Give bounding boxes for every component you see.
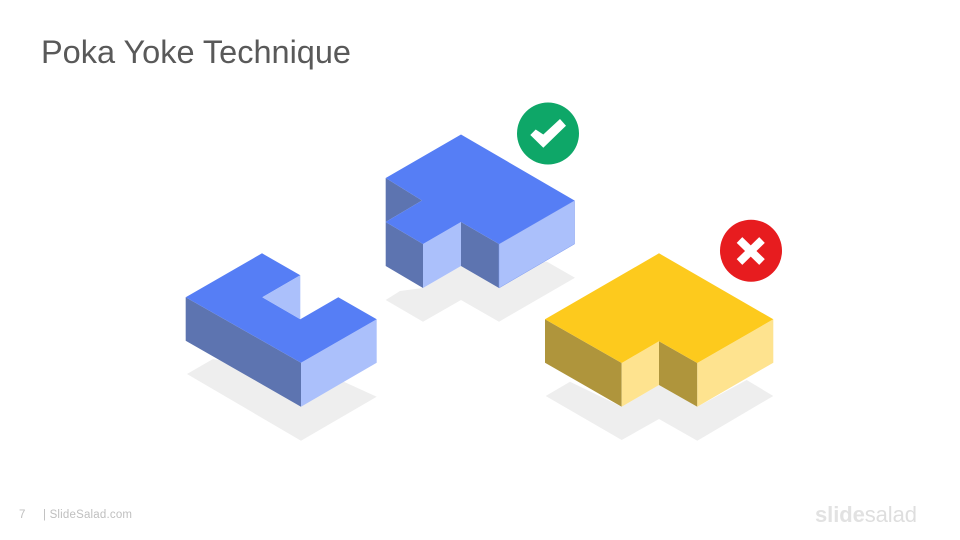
yellow light face [622, 341, 659, 407]
top block top face [386, 134, 574, 244]
page number: 7 [19, 509, 25, 521]
top block second dark face [461, 222, 499, 288]
shadow: top block [386, 262, 575, 322]
icon: green check badge [517, 102, 579, 164]
top blue block with matching notch [386, 134, 575, 322]
logo wordmark: slidesalad [815, 502, 917, 527]
left block notch inner face [262, 275, 300, 319]
left block top face [186, 253, 377, 363]
top block left dark face [386, 222, 423, 288]
yellow top face [545, 253, 773, 363]
left blue block with notch [186, 253, 377, 441]
title: Poka Yoke Technique [41, 34, 351, 70]
shadow: left block [187, 359, 377, 441]
top block light face [423, 222, 461, 288]
top block right light face [499, 200, 574, 288]
left block right light face [301, 319, 377, 407]
footer source: | SlideSalad.com [43, 509, 132, 521]
icon: red cross badge [720, 220, 782, 282]
yellow block [545, 253, 773, 441]
yellow left dark face [545, 319, 622, 407]
yellow second dark face [659, 341, 697, 407]
shadow: yellow block [546, 380, 773, 441]
top block notch dark face [386, 178, 422, 222]
left block front dark face [186, 297, 301, 407]
yellow right light face [697, 319, 773, 407]
